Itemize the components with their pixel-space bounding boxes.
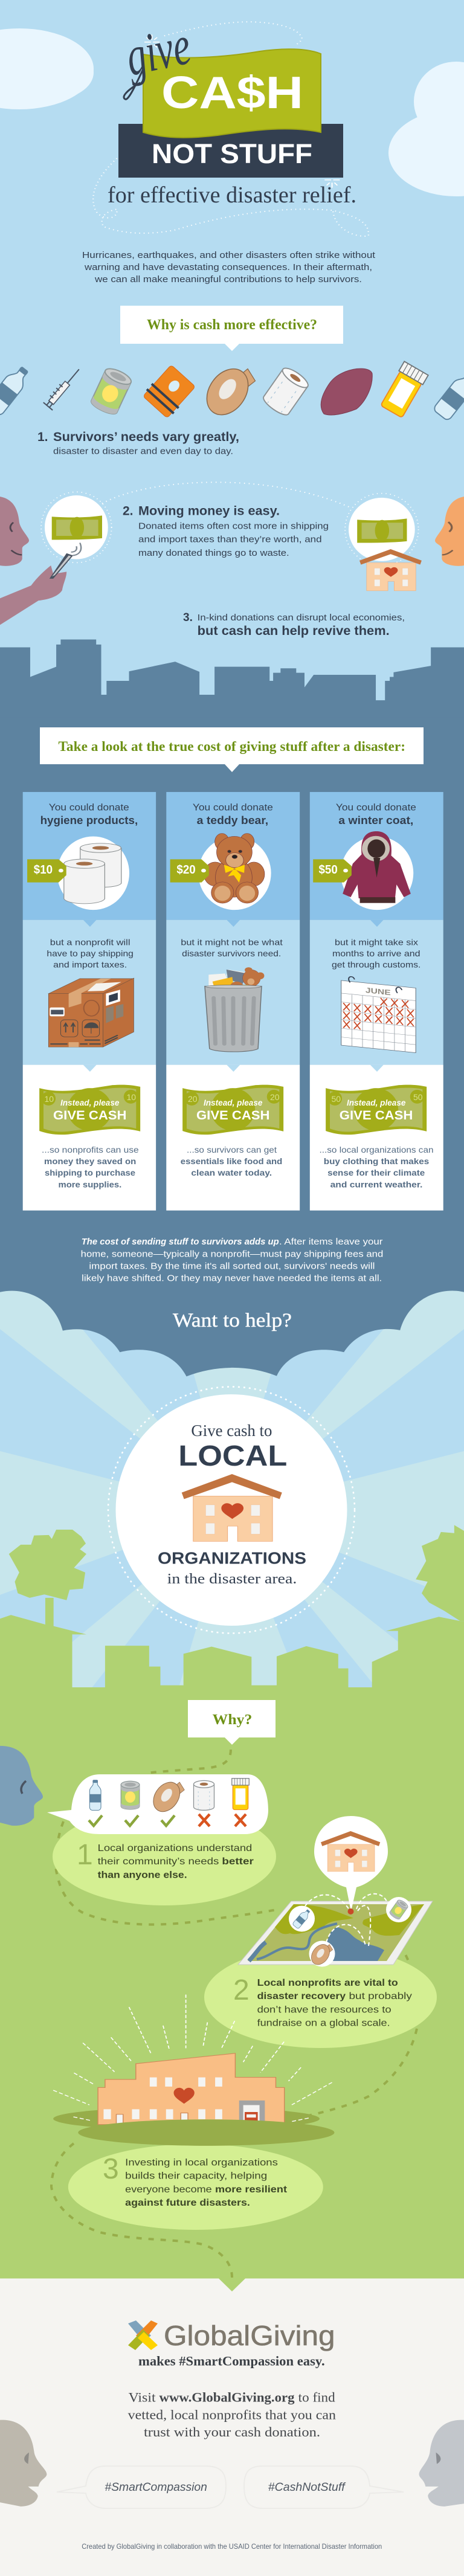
reason 2 text: Local nonprofits are vital to — [257, 1978, 398, 1988]
column middle text: but a nonprofit will — [50, 938, 130, 947]
icon: life vest — [141, 364, 197, 419]
price labels — [34, 863, 338, 877]
windows — [103, 2078, 222, 2119]
column bottom text: ...so nonprofits can use — [42, 1145, 139, 1154]
dashed delivery arcs — [305, 1894, 387, 1946]
icon: water bottle right — [433, 368, 464, 421]
cost paragraph: The cost of sending stuff to survivors adds up — [82, 1237, 279, 1247]
left head — [0, 497, 29, 566]
not stuff banner — [118, 124, 343, 178]
text: give cash to: Give cash to — [191, 1422, 272, 1440]
circle message — [158, 1422, 306, 1587]
map icon: bottle — [289, 1905, 315, 1932]
reason 2 text: but probably — [349, 1991, 412, 2001]
bill numerals — [45, 1092, 423, 1104]
reason 3 text — [125, 2157, 288, 2208]
reason 3 text: builds their capacity, helping — [125, 2171, 267, 2182]
give cash text: GIVE CASH — [53, 1109, 127, 1122]
icon: shipping box — [48, 978, 134, 1047]
reason 1 text: Local organizations understand — [98, 1843, 252, 1853]
column middle text — [47, 938, 420, 969]
cost paragraph — [81, 1237, 383, 1284]
bill numerals: 50 — [413, 1092, 423, 1102]
column headings: You could donate — [336, 803, 416, 813]
hashtag text: #CashNotStuff — [268, 2481, 346, 2494]
column bottom text — [42, 1145, 434, 1189]
column headings: a teddy bear, — [197, 814, 268, 826]
heart — [174, 2088, 195, 2104]
left bill — [52, 515, 102, 540]
dashed journey path — [51, 1750, 417, 2279]
white speech bubble — [47, 1774, 268, 1834]
clouds — [0, 28, 464, 196]
sun rays — [0, 1269, 464, 1692]
reason 1 text: better — [222, 1856, 254, 1867]
white sun circle — [116, 1394, 347, 1626]
green town and trees — [0, 1525, 464, 2282]
GlobalGiving logo — [128, 2320, 335, 2351]
building — [98, 2053, 285, 2125]
intro paragraph: we can all make meaningful contributions to help survivors. — [94, 274, 362, 285]
price tags — [27, 859, 66, 883]
reason 3 text: Investing in local organizations — [125, 2157, 278, 2168]
heading: want to help: Want to help? — [173, 1310, 292, 1331]
icon: nonprofit house with heart — [359, 549, 422, 591]
price labels: $20 — [176, 863, 196, 877]
column bottom text: more supplies. — [58, 1179, 121, 1189]
icon: small house — [321, 1831, 380, 1872]
point 3 text: 3. — [183, 611, 193, 624]
point 2 text: Moving money is easy. — [138, 504, 280, 518]
icon: teddy bear — [204, 833, 265, 903]
reason 3 text: against future disasters. — [125, 2198, 250, 2208]
white radiating dashes — [53, 1995, 332, 2122]
column bottom text: sense for their climate — [327, 1168, 425, 1177]
hashtag speech bubbles — [57, 2466, 404, 2508]
column headings: You could donate — [193, 803, 273, 813]
bill numerals: 10 — [45, 1094, 54, 1104]
dotted sun ring — [108, 1387, 355, 1634]
point 2 text: Donated items often cost more in shipping — [138, 521, 329, 532]
speaker head blue — [0, 1746, 43, 1826]
panel: reason 2 — [204, 1816, 437, 2048]
reason 3 text: more resilient — [215, 2185, 288, 2195]
title — [93, 14, 369, 236]
ground — [53, 2107, 320, 2130]
item bubbles — [57, 836, 129, 910]
point 2 text — [123, 504, 329, 558]
point 2 text: and import taxes than they’re worth, and — [138, 535, 322, 545]
credit line: Created by GlobalGiving in collaboration with the USAID Center for International Disaster Information — [82, 2542, 382, 2551]
garage and truck — [239, 2101, 265, 2125]
point 3 text: but cash can help revive them. — [198, 624, 390, 638]
icon: house with heart — [182, 1474, 282, 1541]
cash flag — [143, 49, 321, 138]
cost paragraph: . After items leave your — [279, 1237, 382, 1247]
give cash text — [53, 1098, 413, 1122]
logo wordmark: GlobalGiving — [164, 2320, 335, 2351]
item icons — [89, 1777, 249, 1817]
give cash text: Instead, please — [60, 1098, 120, 1107]
column bottom text: essentials like food and — [181, 1156, 282, 1166]
column bottom text: ...so local organizations can — [319, 1145, 434, 1154]
column middle text: but it might not be what — [181, 938, 283, 947]
column headings — [40, 803, 416, 826]
icon: trash can — [205, 967, 264, 1052]
checks and crosses — [89, 1814, 246, 1826]
point 2 text: many donated things go to waste. — [138, 548, 289, 558]
hashtag text — [105, 2481, 346, 2494]
why bubble — [188, 1700, 276, 1745]
right white bubble — [349, 498, 415, 561]
icon: water bottle left — [0, 363, 33, 416]
callout: true cost — [40, 727, 424, 772]
reason 2 text — [257, 1978, 412, 2029]
icon: toilet paper rolls — [64, 843, 121, 904]
intro paragraph: warning and have devastating consequences. In their aftermath, — [84, 262, 372, 272]
sparkles — [144, 34, 340, 188]
reason 2 text: disaster recovery — [257, 1991, 346, 2001]
price labels: $50 — [319, 863, 338, 877]
text: local: LOCAL — [178, 1440, 287, 1472]
icon: calendar — [341, 976, 416, 1053]
green ellipse 1 — [53, 1808, 276, 1905]
panel: reason 3 — [53, 1995, 334, 2230]
point 1 text: disaster to disaster and even day to day. — [53, 446, 233, 457]
pin — [348, 1908, 354, 1914]
icon: food can — [89, 365, 134, 417]
column headings: hygiene products, — [40, 814, 138, 826]
intro paragraph: Hurricanes, earthquakes, and other disasters often strike without — [82, 250, 376, 260]
point 2 text: 2. — [123, 504, 134, 518]
column headings: a winter coat, — [338, 814, 413, 826]
column bottom text: clean water today. — [191, 1168, 272, 1177]
visit text: trust with your cash donation. — [144, 2424, 320, 2439]
reason 1 text: their community’s needs — [98, 1856, 219, 1867]
give cash text: GIVE CASH — [340, 1109, 413, 1122]
arm with phone — [0, 543, 81, 625]
bill numerals: 50 — [331, 1094, 341, 1104]
map icon: tape — [308, 1940, 335, 1968]
cost paragraph: home, someone—typically a nonprofit—must pay shipping fees and — [81, 1249, 383, 1259]
price labels: $10 — [34, 863, 53, 877]
cost paragraph: import taxes. By the time it's all sorted out, survivors' needs will — [89, 1261, 375, 1271]
grey head right — [419, 2420, 464, 2507]
number 2: 2 — [233, 1974, 250, 2006]
point 1 text: Survivors’ needs vary greatly, — [53, 430, 239, 444]
right tree — [416, 1525, 464, 1621]
visit text: www.GlobalGiving.org — [160, 2390, 295, 2405]
eye — [21, 1781, 26, 1794]
hashtag text: #SmartCompassion — [105, 2481, 207, 2494]
text: in the disaster area: in the disaster area. — [167, 1571, 297, 1587]
point 3 text: In-kind donations can disrupt local economies, — [198, 613, 405, 623]
icon: blanket — [321, 369, 372, 415]
give cash text: Instead, please — [347, 1098, 406, 1107]
grey head left — [0, 2420, 47, 2507]
green pointer — [219, 2279, 245, 2291]
column bottom text: money they saved on — [44, 1156, 136, 1166]
bill numerals: 10 — [127, 1092, 136, 1102]
icon: syringe — [44, 365, 84, 410]
column bottom text: shipping to purchase — [45, 1168, 135, 1177]
column bottom text: ...so survivors can get — [187, 1145, 277, 1154]
right head — [435, 497, 464, 566]
icon: pill bottle — [379, 361, 428, 419]
right bill — [357, 518, 407, 543]
map icon: can — [386, 1897, 411, 1922]
icon: bandage tape — [198, 361, 257, 423]
give script: give — [120, 14, 196, 88]
green ellipse 3 — [68, 2144, 323, 2230]
visit text: vetted, local nonprofits that you can — [128, 2407, 336, 2422]
panel: columns backgrounds — [23, 792, 443, 1211]
visit text: to find — [298, 2390, 335, 2405]
location pin balloon — [314, 1816, 388, 1911]
column bottom text: buy clothing that makes — [324, 1156, 429, 1166]
give cash text: GIVE CASH — [196, 1109, 269, 1122]
column headings: You could donate — [49, 803, 129, 813]
reason 2 text: fundraise on a global scale. — [257, 2018, 390, 2029]
bill numerals: 20 — [188, 1094, 198, 1104]
not stuff text: NOT STUFF — [152, 138, 312, 169]
column middle text: have to pay shipping — [47, 948, 134, 958]
visit text — [128, 2390, 336, 2439]
left tree — [9, 1530, 86, 1600]
icon: winter coat — [343, 831, 411, 903]
point 3 text — [183, 611, 405, 638]
icon: calendar: JUNE — [366, 986, 391, 997]
why bubble: Why? — [213, 1712, 252, 1728]
reason 1 text — [98, 1843, 254, 1880]
column middle text: get through customs. — [332, 959, 420, 969]
callout: why is cash more effective: Why is cash more effective? — [147, 317, 317, 333]
tagline: makes #SmartCompassion easy. — [138, 2354, 325, 2368]
column middle text: but it might take six — [335, 938, 418, 947]
bill numerals: 20 — [270, 1092, 280, 1102]
dotted arc — [102, 482, 349, 507]
column middle text: months to arrive and — [332, 948, 420, 958]
give script — [120, 14, 196, 99]
bill 2 — [182, 1085, 283, 1135]
callout: true cost: Take a look at the true cost of giving stuff after a disaster: — [58, 739, 405, 754]
cost paragraph: likely have shifted. Or they may never have needed the items at all. — [82, 1274, 382, 1284]
column bottom text: and current weather. — [330, 1179, 422, 1189]
logo puzzle mark — [128, 2320, 158, 2350]
front ground — [78, 2119, 334, 2146]
building illustration — [53, 1995, 334, 2146]
map — [238, 1901, 433, 1965]
green ellipse 2 — [204, 1946, 437, 2048]
dark city skyline and background — [0, 639, 464, 1376]
doors — [116, 2113, 188, 2125]
title dotted loops — [93, 22, 369, 236]
panel: footer — [0, 2279, 464, 2576]
reason 2 text: don’t have the resources to — [257, 2004, 392, 2015]
intro paragraph — [82, 250, 376, 285]
subtitle: for effective disaster relief. — [108, 182, 356, 208]
number 3: 3 — [103, 2153, 119, 2185]
give cash text: Instead, please — [204, 1098, 263, 1107]
point 2 illustration — [0, 482, 464, 625]
bill 3 — [326, 1085, 427, 1135]
number 1: 1 — [77, 1839, 93, 1871]
panel: reason 1 — [47, 1774, 276, 1905]
visit text: Visit — [129, 2390, 156, 2405]
cash text: CA$H — [161, 67, 303, 118]
reason 1 text: than anyone else. — [98, 1870, 187, 1880]
point 1 text: 1. — [37, 430, 48, 444]
instead please give cash bills — [39, 1085, 427, 1135]
bill 1 — [39, 1085, 140, 1135]
text: organizations: ORGANIZATIONS — [158, 1549, 306, 1568]
icon: toilet paper — [261, 365, 311, 418]
reason 3 text: everyone become — [125, 2185, 212, 2195]
column middle text: disaster survivors need. — [182, 948, 281, 958]
relief item icons row — [0, 361, 464, 423]
point 1 text — [37, 430, 239, 457]
column middle text: and import taxes. — [53, 959, 127, 969]
callout: why is cash more effective — [120, 306, 343, 351]
left white bubble — [45, 495, 108, 559]
